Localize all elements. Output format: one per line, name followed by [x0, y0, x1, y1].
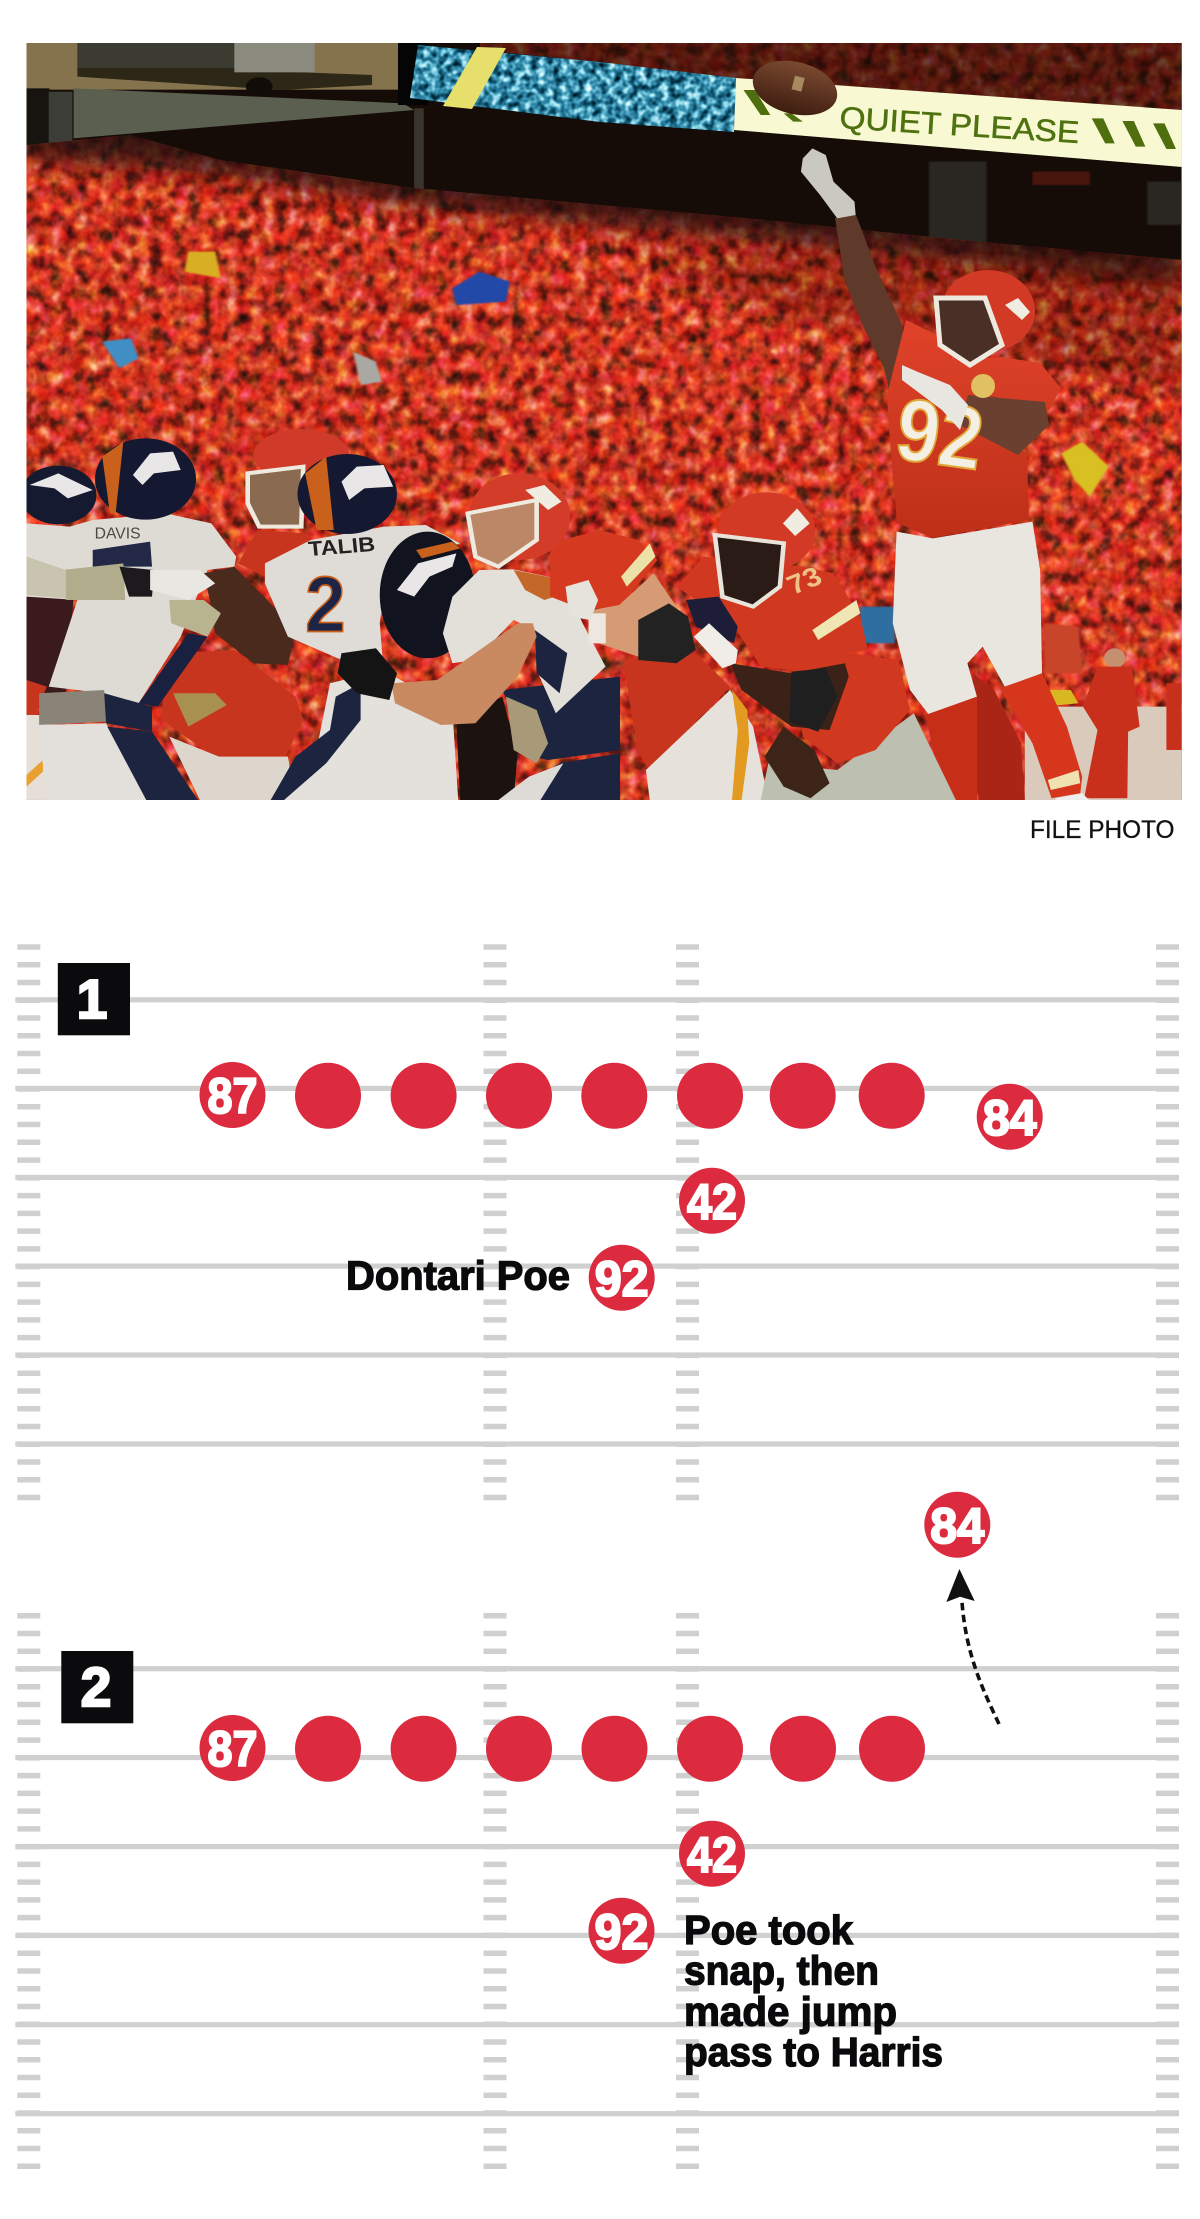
Talib	[265, 454, 460, 800]
callout: Poe took snap: made jump	[684, 1988, 897, 2034]
field hash marks 2	[29, 1613, 1167, 2170]
player: Poe with number 92	[801, 148, 1090, 801]
helmet	[941, 270, 1035, 352]
photo credit: FILE PHOTO	[1030, 816, 1174, 844]
quiet please banner: QUIET PLEASE	[839, 100, 1080, 150]
Chiefs lineman 73: 73	[782, 561, 827, 601]
left glove	[801, 148, 856, 218]
Talib: 2	[305, 561, 346, 649]
photo: Poe jump pass at goal line	[26, 43, 1182, 800]
player 42: 42	[687, 1174, 737, 1230]
upper deck dark crowd	[480, 43, 1182, 110]
step number 1: 1	[77, 968, 107, 1030]
field yard lines 2	[15, 1666, 1179, 2116]
sideline staff	[967, 623, 1186, 802]
line of scrimmage pile	[20, 429, 956, 800]
player 87: 87	[208, 1721, 258, 1777]
stadium wall	[27, 43, 424, 198]
player 84: 84	[983, 1090, 1037, 1146]
left group in zoom coordinates: DAVIS	[95, 525, 141, 542]
callout: Poe took snap	[684, 1907, 943, 2075]
panel: play diagram 2	[15, 1492, 1179, 2170]
chest glove	[902, 365, 968, 430]
callout: Poe took snap: pass to Harris	[684, 2029, 943, 2075]
panel: play diagram 1	[15, 944, 1179, 1500]
field hash marks 1	[29, 944, 1167, 1500]
raised arm	[835, 215, 905, 395]
offensive line 2	[295, 1716, 925, 1782]
crowd	[26, 135, 1182, 800]
jersey	[887, 320, 1061, 538]
label: Dontari Poe: Dontari Poe	[346, 1252, 570, 1298]
player 84: 84	[930, 1498, 984, 1554]
player 87: 87	[208, 1068, 258, 1124]
scoreboard ribbon	[398, 43, 736, 132]
step number 2	[61, 1651, 133, 1723]
step number 1	[58, 963, 130, 1035]
player 42: 42	[687, 1827, 737, 1883]
callout: Poe took snap: Poe took	[684, 1907, 853, 1953]
callout: Poe took snap: snap, then	[684, 1947, 879, 1993]
stand shadows	[929, 162, 1182, 245]
player 92: 92	[594, 1904, 648, 1960]
player 92: 92	[595, 1251, 649, 1307]
right arm	[960, 395, 1049, 455]
offensive line 1	[295, 1063, 925, 1129]
left group in zoom coordinates	[20, 429, 349, 800]
step number 2: 2	[81, 1656, 111, 1718]
centre Bronco	[338, 532, 620, 800]
football	[752, 60, 838, 116]
jersey number: 92	[890, 379, 989, 489]
Chiefs lineman 72	[550, 530, 768, 800]
arrow: route of 84	[946, 1569, 999, 1724]
pants	[893, 522, 1042, 715]
Talib: TALIB	[307, 532, 376, 561]
socks	[925, 673, 1090, 801]
Chiefs lineman 73	[677, 492, 956, 800]
quiet please banner	[734, 78, 1182, 167]
field yard lines 1	[15, 997, 1179, 1447]
